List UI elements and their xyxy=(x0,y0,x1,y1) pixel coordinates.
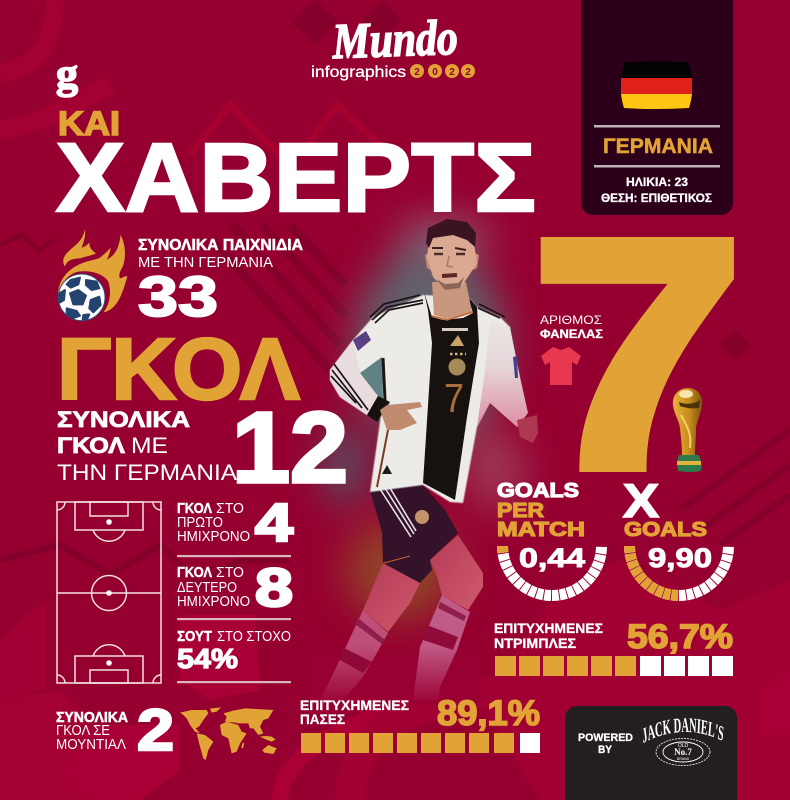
jersey label xyxy=(540,315,603,385)
pitch diagram xyxy=(57,502,161,683)
logo: Mundo infographics 2022: 2 xyxy=(414,67,420,78)
first name: ΚΑΙ xyxy=(58,105,120,143)
stat: second half goals: ΔΕΥΤΕΡΟ xyxy=(177,580,237,596)
logo: Mundo infographics 2022: 2 xyxy=(465,67,471,78)
shirt triangle xyxy=(382,465,392,474)
shirt crest and number xyxy=(442,328,468,331)
icon: world cup trophy xyxy=(673,388,702,472)
player: 7 xyxy=(444,375,464,421)
stat: first half goals: ΗΜΙΧΡΟΝΟ xyxy=(177,529,250,545)
panel: Germany xyxy=(581,0,733,215)
goals per match xyxy=(497,480,602,596)
expected goals: X xyxy=(623,474,659,527)
stat: total world cup goals: ΜΟΥΝΤΙΑΛ xyxy=(56,737,126,753)
black shirt stripe xyxy=(423,292,479,500)
ears xyxy=(425,253,479,270)
stat: total world cup goals: ΣΥΝΟΛΙΚΑ xyxy=(56,710,128,726)
right leg xyxy=(430,535,483,610)
logo: Mundo infographics 2022: 2 xyxy=(449,67,455,78)
right sleeve xyxy=(477,320,528,427)
icon: world map xyxy=(180,707,277,760)
expected goals: 9,90 xyxy=(648,543,712,573)
heading: goals: ΓΚΟΛ xyxy=(57,321,300,418)
stat: total world cup goals xyxy=(56,698,174,763)
stat: total world cup goals: 2 xyxy=(137,698,174,763)
player xyxy=(310,219,538,705)
stat: shots on target: ΣΤΟ ΣΤΟΧΟ xyxy=(217,629,291,645)
stat: successful passes: 89,1% xyxy=(437,694,540,733)
progress squares xyxy=(301,733,540,753)
stat: total goals for Germany xyxy=(57,392,348,504)
stat: successful dribbles: ΕΠΙΤΥΧΗΜΕΝΕΣ xyxy=(494,620,603,636)
stat: total matches: 33 xyxy=(138,265,218,329)
stat: total world cup goals: ΓΚΟΛ ΣΕ xyxy=(56,723,110,739)
goals per match: MATCH xyxy=(497,519,585,541)
icon: red shirt xyxy=(541,347,581,385)
stat: total goals for Germany: ΜΕ xyxy=(131,433,168,458)
jersey label: ΦΑΝΕΛΑΣ xyxy=(540,329,603,341)
stat: second half goals xyxy=(177,558,293,618)
stat: shots on target xyxy=(177,629,291,674)
head xyxy=(427,227,477,290)
country name: ΓΕΡΜΑΝΙΑ xyxy=(603,135,713,158)
logo: Mundo infographics 2022: infographics xyxy=(311,64,406,81)
stat: second half goals: 8 xyxy=(255,558,293,618)
hair xyxy=(426,219,476,248)
stat: successful passes: ΕΠΙΤΥΧΗΜΕΝΕΣ xyxy=(300,697,409,713)
publisher logo g: g xyxy=(56,52,78,98)
left leg xyxy=(363,563,420,632)
sponsor logo: No.7 xyxy=(674,747,692,757)
sleeve patches xyxy=(353,331,371,351)
stat: first half goals: ΠΡΩΤΟ xyxy=(177,515,223,531)
stat: total matches: ΜΕ ΤΗΝ ΓΕΡΜΑΝΙΑ xyxy=(138,254,273,271)
goals per match: GOALS xyxy=(497,480,579,502)
beard shade xyxy=(436,277,464,290)
stat: total goals for Germany: ΓΚΟΛ xyxy=(57,433,125,458)
panel: sponsor: BY xyxy=(598,744,613,756)
stat: second half goals: ΣΤΟ xyxy=(216,565,244,581)
torso and left sleeve xyxy=(330,295,510,503)
position: ΘΕΣΗ: ΕΠΙΘΕΤΙΚΟΣ xyxy=(601,191,712,205)
panel: sponsor: POWERED xyxy=(578,732,633,744)
face details xyxy=(432,248,466,250)
expected goals xyxy=(623,474,728,596)
surname title: ΧΑΒΕΡΤΣ xyxy=(56,123,536,232)
stat: second half goals: ΓΚΟΛ xyxy=(177,565,212,581)
stat: successful dribbles: 56,7% xyxy=(627,618,733,656)
goals per match: 0,44 xyxy=(519,543,585,573)
stat: shots on target: ΣΟΥΤ xyxy=(177,629,212,645)
gauge: 9,90 xyxy=(630,546,728,596)
stat: shots on target: 54% xyxy=(177,643,238,674)
stat: first half goals: ΣΤΟ xyxy=(216,501,244,517)
stat: total goals for Germany: 12 xyxy=(232,392,348,504)
stat: successful passes xyxy=(300,694,540,753)
progress squares xyxy=(495,656,733,676)
neck xyxy=(432,282,472,319)
stat: successful passes: ΠΑΣΕΣ xyxy=(300,711,345,727)
sleeve stripes xyxy=(331,295,505,487)
stat: first half goals: 4 xyxy=(255,493,293,553)
sponsor logo: JACK DANIEL'S xyxy=(643,718,724,743)
age: ΗΛΙΚΙΑ: 23 xyxy=(626,175,688,189)
logo: Mundo infographics 2022 xyxy=(311,9,475,81)
player photo background glow xyxy=(323,221,525,620)
leg fade xyxy=(310,645,480,705)
panel: sponsor xyxy=(565,706,737,800)
shorts xyxy=(370,485,458,583)
icon: flaming football xyxy=(58,229,127,321)
jersey number 7: 7 xyxy=(530,172,745,537)
stat: second half goals: ΗΜΙΧΡΟΝΟ xyxy=(177,594,250,610)
cuff xyxy=(367,396,390,422)
sponsor logo: BRAND xyxy=(677,757,690,761)
stat: first half goals: ΓΚΟΛ xyxy=(177,501,212,517)
sponsor logo: OLD xyxy=(678,743,689,749)
logo: Mundo infographics 2022: 0 xyxy=(432,67,438,78)
stat: total matches xyxy=(138,237,303,329)
stat: total goals for Germany: ΣΥΝΟΛΙΚΑ xyxy=(57,407,190,432)
sponsor logo xyxy=(643,718,724,766)
stat: first half goals xyxy=(177,493,293,553)
stat: total matches: ΣΥΝΟΛΙΚΑ ΠΑΙΧΝΙΔΙΑ xyxy=(138,237,303,254)
stat: successful dribbles: ΝΤΡΙΜΠΛΕΣ xyxy=(494,635,576,651)
jersey label: ΑΡΙΘΜΟΣ xyxy=(540,315,602,327)
gauge: 0,44 xyxy=(502,546,602,596)
stat: successful dribbles xyxy=(494,618,733,676)
stat: total goals for Germany: ΤΗΝ ΓΕΡΜΑΝΙΑ xyxy=(57,460,237,485)
expected goals: GOALS xyxy=(624,519,707,541)
icon: German flag xyxy=(621,62,692,109)
goals per match: PER xyxy=(497,500,545,522)
logo: Mundo infographics 2022: Mundo xyxy=(331,9,459,69)
hand xyxy=(380,402,422,430)
